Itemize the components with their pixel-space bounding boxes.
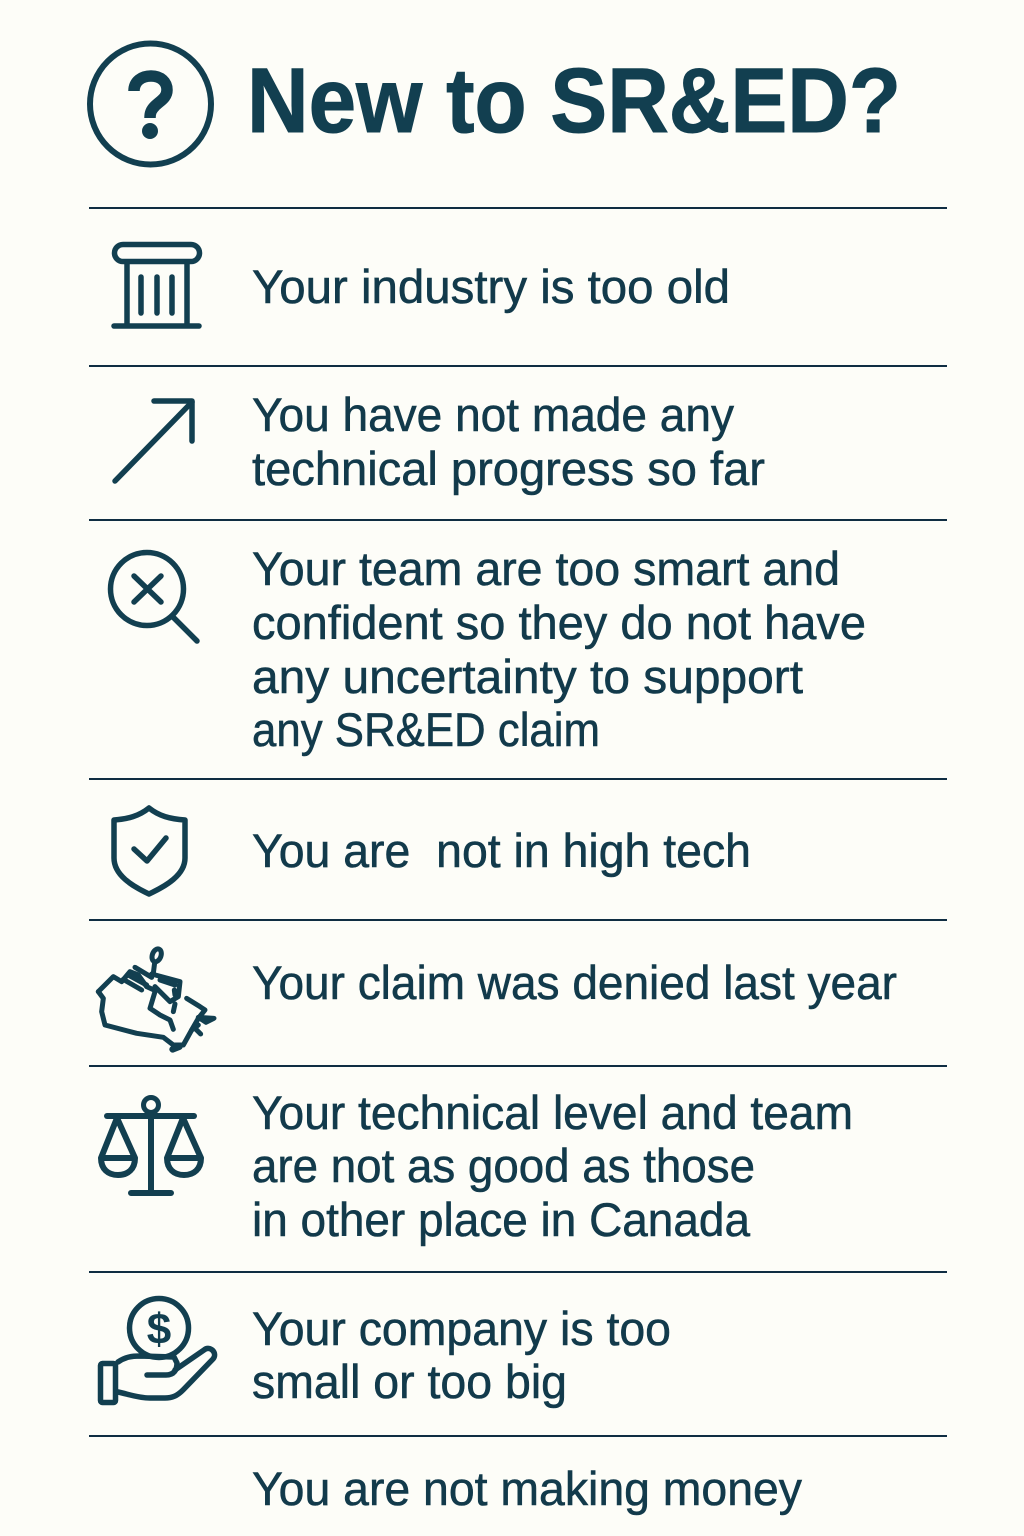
- text: claim denied: Your claim was denied last year: [252, 956, 897, 1009]
- icon: balance scales: [101, 1098, 201, 1193]
- icon: upward arrow: [115, 401, 192, 481]
- text: team too smart: any SR&ED claim: [252, 703, 600, 756]
- text: no technical progress: [252, 388, 765, 495]
- text: no technical progress: You have not made any: [252, 388, 734, 441]
- text: not making money: You are not making money: [252, 1462, 802, 1515]
- icon: magnifier with x: [110, 552, 197, 641]
- text: industry too old: Your industry is too old: [252, 260, 730, 313]
- text: no technical progress: technical progress so far: [252, 442, 765, 495]
- text: team too smart: any uncertainty to support: [252, 650, 803, 703]
- icon: map of Canada: [98, 948, 214, 1049]
- icon: hand holding dollar coin: [100, 1298, 215, 1402]
- text: team too smart: [252, 542, 866, 756]
- text: technical level: Your technical level and team: [252, 1086, 853, 1139]
- text: not in high tech: You are not in high tech: [252, 824, 751, 877]
- icon: shield with check: [114, 808, 185, 894]
- title: New to SR&ED?: [247, 50, 901, 152]
- text: team too smart: Your team are too smart and: [252, 542, 840, 595]
- text: company size: Your company is too: [252, 1302, 671, 1355]
- text: company size: [252, 1302, 671, 1408]
- text: company size: small or too big: [252, 1355, 567, 1408]
- icon: hand holding dollar coin: $: [147, 1305, 171, 1354]
- text: technical level: in other place in Canada: [252, 1193, 751, 1246]
- icon: question mark in circle: [90, 44, 211, 164]
- text: technical level: are not as good as those: [252, 1139, 755, 1192]
- text: technical level: [252, 1086, 853, 1246]
- text: team too smart: confident so they do not have: [252, 596, 866, 649]
- icon: classical column: [114, 244, 200, 326]
